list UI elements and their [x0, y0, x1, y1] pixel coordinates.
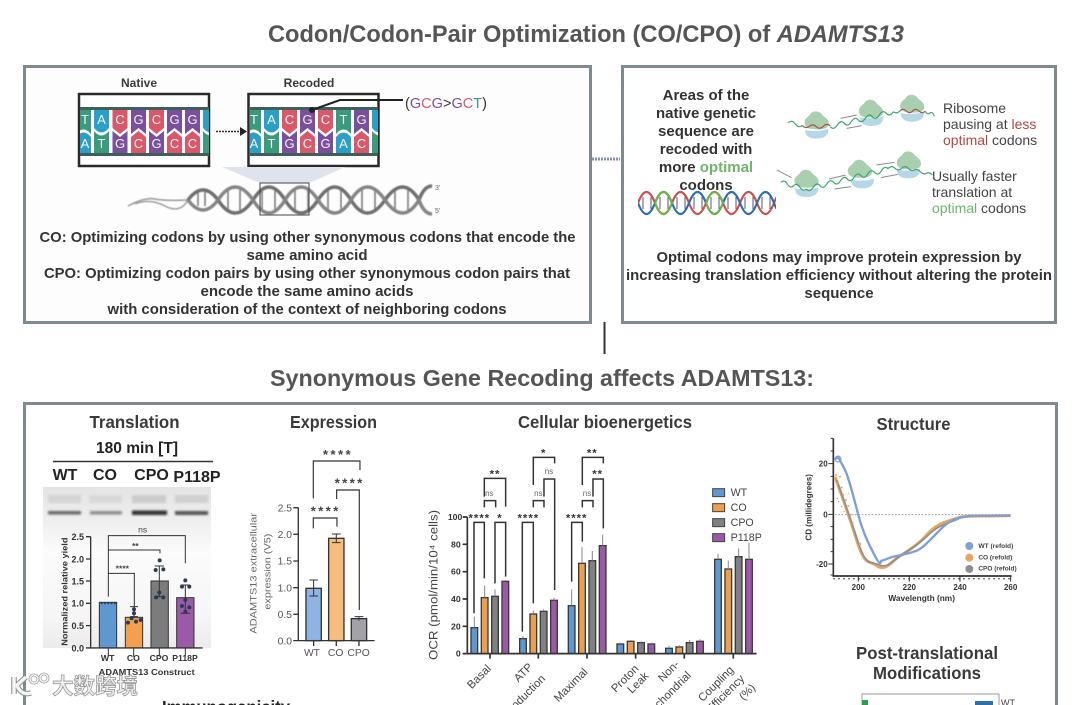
bar chart: oxygen consumption rate: 0	[456, 649, 461, 659]
bar chart: ADAMTS13 extracellular expression: 1.5	[278, 557, 292, 568]
gel lane labels: P118P	[173, 469, 221, 486]
bar chart: normalized relative yield: 0.0	[71, 643, 84, 653]
bar chart: oxygen consumption rate: *	[497, 512, 503, 524]
panel: results	[24, 404, 1056, 705]
bar chart: ADAMTS13 extracellular expression: WT	[304, 648, 321, 659]
bar chart: oxygen consumption rate: 80	[451, 539, 461, 549]
recoded sequence strip: T	[340, 112, 348, 127]
bar chart: oxygen consumption rate: ns	[534, 489, 543, 498]
text: recoding summary: Areas of the	[663, 87, 749, 104]
legend: CO	[731, 502, 747, 514]
native sequence strip: C	[115, 112, 125, 127]
bar chart: oxygen consumption rate: OCR (pmol/min/10⁴ cells)	[426, 510, 440, 660]
bar chart: oxygen consumption rate: Basal	[465, 663, 494, 691]
connector line to results	[604, 322, 606, 354]
text: CO and CPO definitions: encode the same amino acids	[200, 283, 414, 300]
text: recoding summary: codons	[679, 177, 733, 194]
native sequence strip: C	[170, 136, 179, 151]
bar chart: oxygen consumption rate: Non-	[656, 658, 682, 684]
icon: DNA helix	[128, 183, 440, 215]
native sequence strip: A	[81, 136, 90, 151]
bar chart: normalized relative yield: P118P	[172, 653, 198, 663]
heading: translation: Translation	[90, 412, 180, 432]
bar chart: oxygen consumption rate: ns	[485, 489, 494, 498]
bar chart: oxygen consumption rate: 20	[451, 621, 461, 631]
panel: optimal codons explanation	[622, 66, 1056, 322]
native sequence strip: G	[151, 136, 162, 151]
text: CO and CPO definitions: CO: Optimizing codons by using other synonymous codons that encode the	[40, 229, 576, 246]
bar chart: oxygen consumption rate: (%)	[737, 682, 758, 703]
heading: post-translational modifications: Modifications	[873, 663, 981, 683]
native sequence strip: C	[134, 136, 143, 151]
native sequence strip	[76, 94, 218, 166]
recoded sequence strip: G	[356, 112, 367, 127]
native sequence strip: C	[188, 136, 197, 151]
legend: CO (refold)	[978, 554, 1012, 561]
text: optimal codon conclusion: sequence	[804, 285, 874, 302]
line chart: circular dichroism: 200	[852, 583, 866, 592]
bar chart: oxygen consumption rate: Proton	[609, 663, 641, 695]
line chart: circular dichroism: CD (millidegrees)	[803, 474, 813, 541]
recoded sequence strip: C	[285, 112, 294, 127]
heading: cellular bioenergetics: Cellular bioenergetics	[518, 412, 692, 432]
icon: coloured DNA	[638, 192, 791, 214]
bar chart: ADAMTS13 extracellular expression: expression (V5)	[263, 534, 273, 610]
bar chart: oxygen consumption rate: ****	[566, 512, 587, 524]
bar chart: normalized relative yield: ****	[116, 563, 130, 573]
dotted connector between panels	[592, 158, 620, 160]
line chart: circular dichroism: 240	[953, 583, 967, 592]
bar chart: normalized relative yield: Normalized relative yield	[60, 537, 70, 646]
text: ribosome pausing: Ribosome	[943, 100, 1006, 116]
heading: recoding effects: Synonymous Gene Recoding affects ADAMTS13:	[270, 365, 814, 391]
bar chart: oxygen consumption rate: **	[490, 469, 500, 481]
legend: P118P	[731, 532, 762, 544]
bar chart: oxygen consumption rate: ns	[545, 467, 553, 476]
icon: DNA helix: 5'	[435, 208, 440, 215]
legend	[965, 542, 1017, 573]
text: optimal codon conclusion: Optimal codons may improve protein expression by	[656, 249, 1022, 266]
label: recoded: Recoded	[284, 76, 334, 90]
text: ribosome pausing: optimal codons	[943, 132, 1037, 148]
bar chart: oxygen consumption rate: 60	[451, 567, 461, 577]
watermark: 大数跨境	[52, 674, 138, 699]
text: optimal codon conclusion: increasing translation efficiency without altering the protein	[626, 267, 1052, 284]
bar chart: oxygen consumption rate: Coupling	[696, 664, 736, 704]
recoded sequence strip: A	[339, 136, 348, 151]
text: CO and CPO definitions	[40, 229, 576, 318]
text: faster translation: translation at	[932, 184, 1012, 200]
text: faster translation	[932, 168, 1026, 216]
bar chart: normalized relative yield	[60, 524, 203, 677]
recoded sequence strip	[246, 94, 387, 166]
zoom wedge	[222, 167, 345, 183]
title: Codon/Codon-Pair Optimization (CO/CPO) of ADAMTS13	[268, 21, 905, 48]
bar chart: oxygen consumption rate: **	[587, 447, 598, 459]
text: recoding summary: sequence are	[658, 123, 754, 140]
native sequence strip: A	[97, 112, 106, 127]
recoded sequence strip: G	[302, 112, 313, 127]
bar chart: ADAMTS13 extracellular expression: CO	[328, 648, 343, 659]
bar chart: ADAMTS13 extracellular expression: CPO	[347, 648, 370, 659]
recoded sequence strip: T	[250, 112, 258, 127]
bar chart: normalized relative yield: **	[132, 541, 139, 551]
native sequence strip: G	[169, 112, 180, 127]
bar chart: oxygen consumption rate: ATP	[512, 661, 535, 685]
bar chart: oxygen consumption rate: Leak	[626, 670, 652, 696]
icon: ribosomes fast translation	[777, 151, 932, 197]
line chart: circular dichroism: 0	[823, 510, 828, 519]
heading: expression: Expression	[290, 412, 377, 432]
recoded sequence strip: T	[268, 136, 276, 151]
native sequence strip: T	[81, 112, 89, 127]
native sequence strip: C	[152, 112, 161, 127]
bar chart: normalized relative yield: CPO	[150, 653, 169, 663]
native sequence strip: G	[133, 112, 144, 127]
text: CO and CPO definitions: with consideration of the context of neighboring codons	[107, 301, 506, 318]
bar chart: ADAMTS13 extracellular expression: 2.5	[278, 503, 292, 514]
bar chart: ADAMTS13 extracellular expression: ****	[311, 503, 341, 518]
gel lane labels: WT	[53, 467, 78, 484]
bar chart: oxygen consumption rate: ns	[583, 489, 591, 498]
recoded sequence strip: A	[267, 112, 276, 127]
native sequence strip: G	[115, 136, 125, 151]
heading: post-translational modifications: Post-translational	[856, 643, 998, 663]
bar chart: normalized relative yield: 2.0	[71, 554, 84, 564]
text: optimal codon conclusion	[626, 249, 1052, 302]
text: ribosome pausing: pausing at less	[943, 116, 1036, 132]
label: 180 min T: 180 min [T]	[96, 440, 178, 457]
bar chart: ADAMTS13 extracellular expression: 1.0	[278, 583, 292, 594]
gel lane labels: CPO	[134, 467, 169, 484]
bar chart: ADAMTS13 extracellular expression	[248, 447, 375, 659]
native sequence strip: G	[187, 112, 198, 127]
text: recoding summary: native genetic	[656, 105, 756, 122]
recoded sequence strip: C	[321, 112, 330, 127]
heading: post-translational modifications	[856, 643, 998, 683]
legend: CPO (refold)	[978, 566, 1017, 573]
text: recoding summary: more optimal	[659, 159, 753, 176]
icon: ribosomes pausing	[788, 95, 934, 139]
text: CO and CPO definitions: same amino acid	[246, 247, 368, 264]
watermark	[14, 674, 138, 699]
line chart: circular dichroism: 220	[903, 583, 917, 592]
legend	[713, 487, 762, 544]
bar chart: ADAMTS13 extracellular expression: ****	[335, 476, 365, 491]
bar chart: oxygen consumption rate	[426, 447, 762, 705]
callout: GCG to GCT: (GCG>GCT)	[405, 95, 487, 112]
line chart: circular dichroism: 20	[819, 460, 828, 469]
bar chart: normalized relative yield: 1.0	[71, 599, 84, 609]
recoded sequence strip: G	[320, 136, 331, 151]
bar chart: ADAMTS13 extracellular expression: ADAMTS13 extracellular	[248, 513, 258, 634]
bar chart: normalized relative yield: 2.5	[71, 532, 84, 542]
gel image background	[43, 487, 211, 648]
gel lane labels	[53, 462, 221, 486]
text: recoding summary: recoded with	[660, 141, 752, 158]
recoded sequence strip: G	[284, 136, 295, 151]
bar chart: oxygen consumption rate: ****	[469, 512, 490, 524]
line chart: circular dichroism: Wavelength (nm)	[888, 593, 955, 603]
heading: structure: Structure	[876, 414, 951, 434]
bar chart: ADAMTS13 extracellular expression: 2.0	[278, 530, 292, 541]
bar chart: oxygen consumption rate: ****	[518, 512, 539, 524]
recoded sequence strip: C	[303, 136, 312, 151]
bar chart: normalized relative yield: CO	[127, 653, 140, 663]
bar chart: normalized relative yield: WT	[101, 653, 115, 663]
text: faster translation: Usually faster	[932, 168, 1017, 184]
bar chart: oxygen consumption rate: 100	[448, 512, 463, 522]
bar chart: normalized relative yield: 1.5	[71, 576, 84, 586]
legend: WT	[731, 487, 748, 499]
bar chart: normalized relative yield: 0.5	[71, 621, 84, 631]
recoded sequence strip: A	[250, 136, 259, 151]
text: recoding summary	[656, 87, 756, 194]
text: ribosome pausing	[943, 100, 1037, 148]
arrow: native to recoded	[216, 127, 247, 136]
line chart: circular dichroism	[803, 438, 1018, 603]
legend: WT (refold)	[978, 543, 1013, 550]
bar chart: ADAMTS13 extracellular expression: 0.5	[278, 610, 292, 621]
native sequence strip: T	[98, 136, 106, 151]
chart: post-translational modifications	[862, 694, 1015, 705]
line chart: circular dichroism: -20	[816, 560, 828, 569]
gel lane labels: CO	[93, 467, 117, 484]
label: native: Native	[121, 76, 157, 90]
bar chart: oxygen consumption rate: 40	[451, 594, 461, 604]
bar chart: normalized relative yield: ADAMTS13 Construct	[99, 667, 195, 677]
bar chart: oxygen consumption rate: **	[592, 469, 603, 481]
bar chart: oxygen consumption rate: Maximal	[552, 666, 590, 705]
bar chart: oxygen consumption rate: *	[541, 447, 546, 459]
line chart: circular dichroism: 260	[1004, 583, 1018, 592]
icon: DNA helix: 3'	[435, 185, 440, 192]
callout: GCG to GCT	[309, 95, 487, 113]
legend: CPO	[731, 517, 754, 529]
panel: codon optimization definitions	[24, 66, 590, 322]
bar chart: normalized relative yield: ns	[138, 524, 148, 534]
bar chart: ADAMTS13 extracellular expression: 0.0	[278, 636, 292, 647]
text: CO and CPO definitions: CPO: Optimizing codon pairs by using other synonymous codon pairs that	[44, 265, 570, 282]
text: faster translation: optimal codons	[932, 200, 1026, 216]
recoded sequence strip: C	[357, 136, 366, 151]
bar chart: ADAMTS13 extracellular expression: ****	[323, 447, 353, 462]
